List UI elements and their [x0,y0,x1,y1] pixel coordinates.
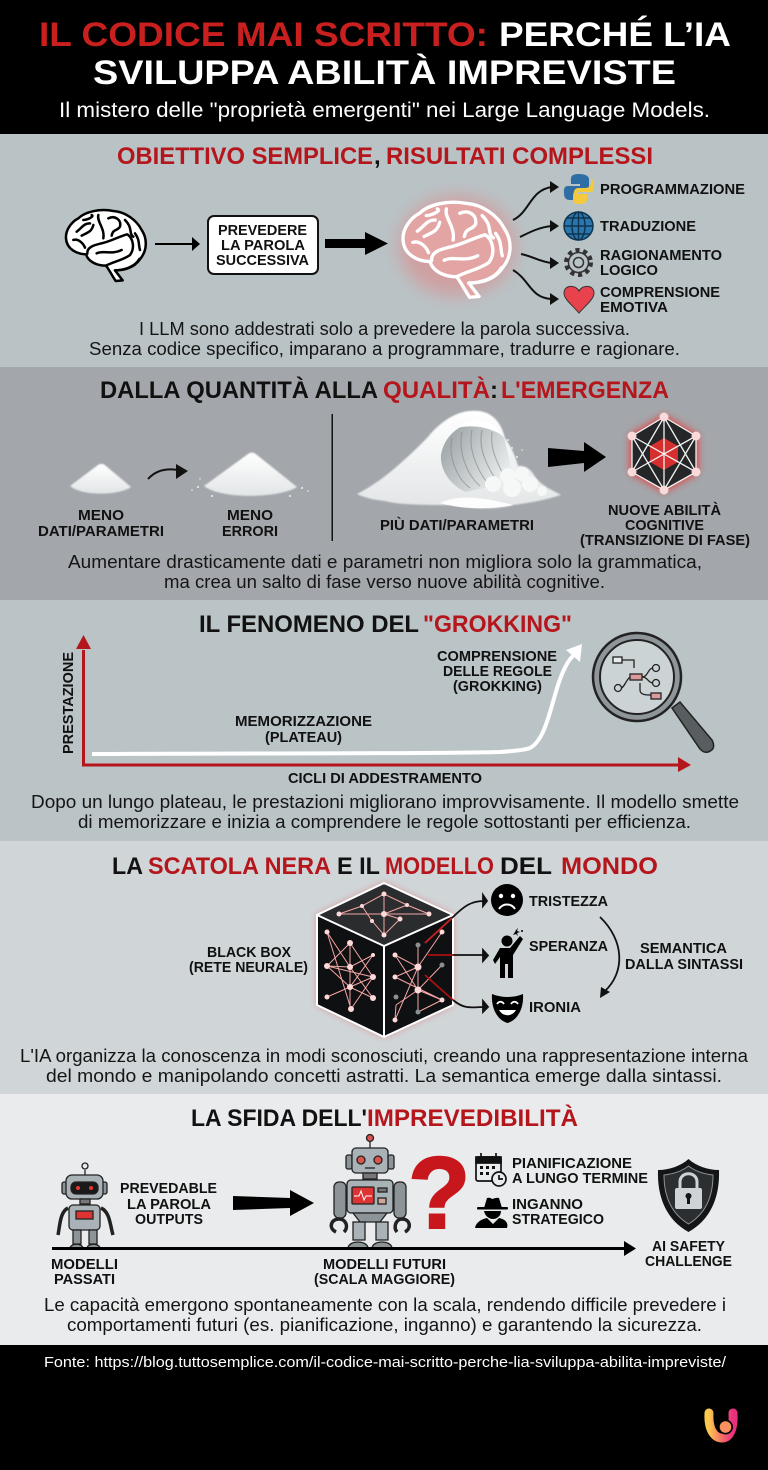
icon: glowing brain [399,196,515,297]
timeline labels: CHALLENGE [645,1253,732,1270]
label: nuove abilità: COGNITIVE [625,517,704,534]
icon: neural cube [317,883,453,1037]
description [89,318,680,359]
heading [112,853,658,880]
left labels: ERRORI [222,523,278,540]
icon: mask [492,994,523,1023]
heading: L'EMERGENZA [501,377,669,404]
logo [709,1413,733,1438]
label: nuove abilità [580,502,750,549]
icon: globe [564,212,593,240]
label: memorizzazione: MEMORIZZAZIONE [235,713,372,730]
left labels: MENO [78,507,124,524]
description: Aumentare drasticamente dati e parametri non migliora solo la grammatica, [68,551,702,572]
icon: wave [357,411,561,508]
icon: large robot [331,1134,409,1248]
larger pile [191,453,309,497]
heading: OBIETTIVO SEMPLICE [117,143,373,170]
heading [100,376,669,404]
label: prevedable: OUTPUTS [135,1211,203,1228]
icon: question mark: ? [408,1136,470,1250]
label: semantica: SEMANTICA [640,940,727,957]
ability labels: COMPRENSIONE [600,284,720,301]
ability labels: LOGICO [600,262,658,279]
emotion labels: SPERANZA [529,938,608,955]
title: IL CODICE MAI SCRITTO: [39,16,488,54]
labels: future behaviours [512,1155,648,1228]
description [20,1045,749,1086]
description: del mondo e manipolando concetti astratti. La semantica emerge dalla sintassi. [46,1065,722,1086]
label: semantica [625,940,743,973]
heading: MONDO [561,853,658,880]
timeline labels: PASSATI [54,1271,115,1288]
box: prevedere la parola successiva [208,216,318,274]
emotion labels: TRISTEZZA [529,893,608,910]
timeline labels [51,1238,732,1288]
heading: DALLA QUANTITÀ ALLA [100,376,378,404]
chart axes [76,635,691,772]
icon: hopeful figure [493,928,523,978]
heading: IL FENOMENO DEL [199,611,419,638]
heading: , [374,143,381,170]
title [39,16,731,92]
icon: sad face [491,884,523,916]
header band [0,0,768,134]
label: black box: (RETE NEURALE) [189,959,308,976]
label: prevedable: PREVEDABLE [120,1180,217,1197]
panel: quantità e qualità [0,367,768,600]
ability labels: TRADUZIONE [600,218,696,235]
heading [199,611,572,638]
panel: obiettivo semplice [0,134,768,367]
heading: QUALITÀ [383,376,490,404]
ability labels: RAGIONAMENTO [600,247,722,264]
labels: future behaviours: A LUNGO TERMINE [512,1170,648,1187]
arrow: semantica [600,917,619,998]
footer [0,1345,768,1470]
labels: future behaviours: STRATEGICO [512,1211,604,1228]
description [44,1294,726,1335]
box: prevedere la parola successiva: PREVEDERE [218,222,307,239]
description: L'IA organizza la conoscenza in modi sconosciuti, creando una rappresentazione interna [20,1045,749,1066]
box: prevedere la parola successiva: SUCCESSIVA [216,252,309,269]
label: memorizzazione [235,713,372,746]
label: black box: BLACK BOX [207,944,291,961]
arrows from cube [425,895,488,1012]
heading: IMPREVEDIBILITÀ [367,1104,578,1132]
label: prevedable: LA PAROLA [127,1196,211,1213]
emotion labels: IRONIA [529,999,581,1016]
ability labels [600,181,745,316]
axis label: prestazione: PRESTAZIONE [60,652,77,754]
label: comprensione [437,648,557,695]
panel: scatola nera [0,841,768,1094]
heading: "GROKKING" [423,611,572,638]
box: prevedere la parola successiva: LA PAROLA [221,237,305,254]
arrow: thin [155,237,200,251]
timeline arrow [52,1241,636,1256]
icon: calendar [476,1153,506,1186]
label: prevedable [120,1180,217,1228]
timeline labels: MODELLI [51,1256,118,1273]
icon: shield [658,1159,719,1232]
label: black box [189,944,308,976]
title: PERCHÉ L’IA [499,16,731,54]
left labels [38,507,278,540]
icon: heart [564,286,594,313]
heading: LA SFIDA DELL' [191,1105,367,1132]
left labels: DATI/PARAMETRI [38,523,164,540]
label: più dati: PIÙ DATI/PARAMETRI [380,516,534,534]
timeline labels: AI SAFETY [652,1238,725,1255]
left labels: MENO [227,507,273,524]
label: comprensione: COMPRENSIONE [437,648,557,665]
label: semantica: DALLA SINTASSI [625,956,743,973]
description: Le capacità emergono spontaneamente con la scala, rendendo difficile prevedere i [44,1294,726,1315]
icon: polyhedron [628,412,700,494]
label: nuove abilità: NUOVE ABILITÀ [608,502,721,519]
description: Dopo un lungo plateau, le prestazioni migliorano improvvisamente. Il modello smette [31,791,739,812]
axis label: cicli: CICLI DI ADDESTRAMENTO [288,770,482,787]
label: comprensione: DELLE REGOLE [443,663,552,680]
timeline labels: (SCALA MAGGIORE) [314,1271,455,1288]
heading: SCATOLA NERA [148,853,331,880]
heading: : [490,377,498,404]
icon: spy [475,1198,508,1228]
icon: magnifier [593,633,714,752]
ability labels: PROGRAMMAZIONE [600,181,745,198]
timeline labels: MODELLI FUTURI [323,1256,446,1273]
description: ma crea un salto di fase verso nuove abilità cognitive. [164,571,605,592]
small pile [70,464,131,494]
heading: MODELLO [385,853,494,880]
curved arrow [148,464,188,479]
icon: python [564,174,594,204]
arrow: thick [325,232,388,255]
icon: small robot [58,1163,113,1248]
description: I LLM sono addestrati solo a prevedere la parola successiva. [139,318,630,339]
panel: grokking [0,600,768,841]
description [31,791,739,832]
heading: DEL [500,853,552,880]
curve: performance [92,644,582,754]
title: SVILUPPA ABILITÀ IMPREVISTE [93,54,676,92]
description [68,551,702,592]
panel: imprevedibilità [0,1094,768,1345]
label: nuove abilità: (TRANSIZIONE DI FASE) [580,532,750,549]
ability labels: EMOTIVA [600,299,668,316]
label: memorizzazione: (PLATEAU) [265,729,342,746]
description: Senza codice specifico, imparano a programmare, tradurre e ragionare. [89,338,680,359]
arrow: thick tapered [548,442,606,472]
source line: Fonte: https://blog.tuttosemplice.com/il-codice-mai-scritto-perche-lia-sviluppa-abilita-impreviste/ [44,1354,727,1371]
icon: gear [566,250,590,274]
arrow: thick tapered [233,1190,314,1216]
label: comprensione: (GROKKING) [453,678,542,695]
heading: LA [112,853,143,880]
arrows to abilities [513,181,559,305]
labels: future behaviours: PIANIFICAZIONE [512,1155,632,1172]
subtitle: Il mistero delle "proprietà emergenti" nei Large Language Models. [59,99,710,122]
heading: RISULTATI COMPLESSI [386,143,653,170]
labels: future behaviours: INGANNO [512,1196,583,1213]
description: comportamenti futuri (es. pianificazione, inganno) e garantendo la sicurezza. [67,1314,702,1335]
description: di memorizzare e inizia a comprendere le regole sottostanti per efficienza. [78,811,691,832]
heading: E IL [337,853,380,880]
emotion labels [529,893,608,1016]
icon: small brain [66,210,146,281]
heading [117,143,653,170]
heading [191,1104,578,1132]
